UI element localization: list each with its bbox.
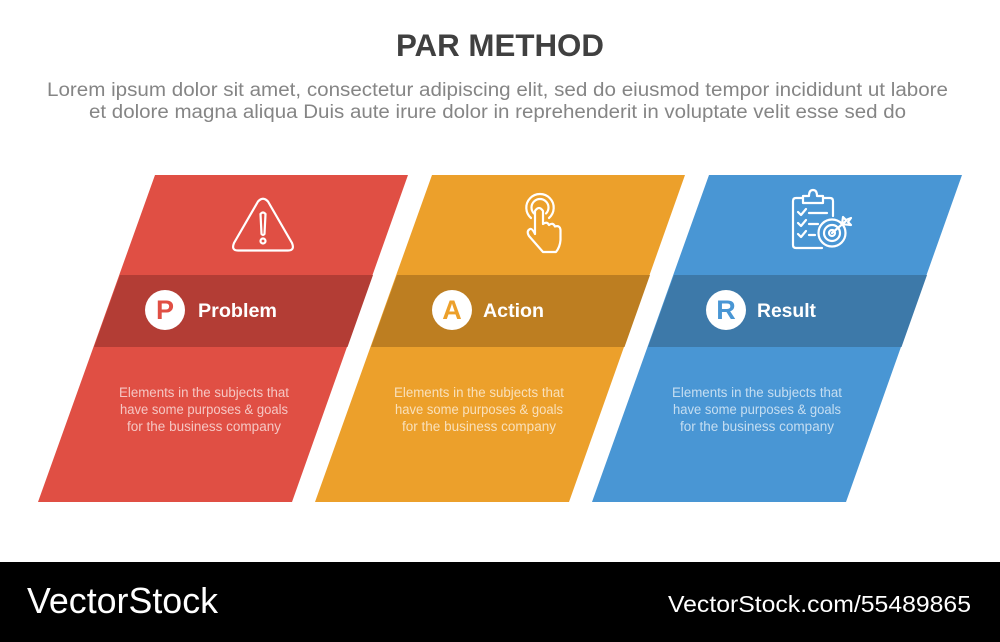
label action: Action [483,301,544,322]
icon: clipboard and target [793,190,851,248]
description result: Elements in the subjects that [672,385,842,400]
description problem [119,385,289,434]
intro text [47,80,948,123]
panel: action [315,175,685,502]
badge P: P [156,295,174,325]
description action [394,385,564,434]
blue parallelogram [592,175,962,502]
intro text: et dolore magna aliqua Duis aute irure dolor in reprehenderit in voluptate velit esse sed do [89,102,906,123]
result band [648,275,927,347]
description result: for the business company [680,419,834,434]
panel: problem [38,175,408,502]
description problem: have some purposes & goals [120,402,288,417]
description action: have some purposes & goals [395,402,563,417]
badge P [145,290,185,330]
title: PAR METHOD [396,27,604,63]
badge R [706,290,746,330]
action band [371,275,650,347]
problem band [94,275,373,347]
orange parallelogram [315,175,685,502]
description problem: for the business company [127,419,281,434]
red parallelogram [38,175,408,502]
icon: tapping hand [526,194,560,252]
footer logo text: VectorStock [27,580,219,621]
label problem: Problem [198,301,277,322]
badge A [432,290,472,330]
panel: result [592,175,962,502]
footer bar [0,562,1000,642]
footer image id: VectorStock.com/55489865 [668,591,971,617]
description result [672,385,842,434]
badge R: R [716,295,736,325]
badge A: A [442,295,462,325]
description action: for the business company [402,419,556,434]
intro text: Lorem ipsum dolor sit amet, consectetur adipiscing elit, sed do eiusmod tempor incididunt ut labore [47,80,948,101]
description action: Elements in the subjects that [394,385,564,400]
label result: Result [757,301,817,322]
description result: have some purposes & goals [673,402,841,417]
description problem: Elements in the subjects that [119,385,289,400]
icon: warning triangle [233,199,293,250]
